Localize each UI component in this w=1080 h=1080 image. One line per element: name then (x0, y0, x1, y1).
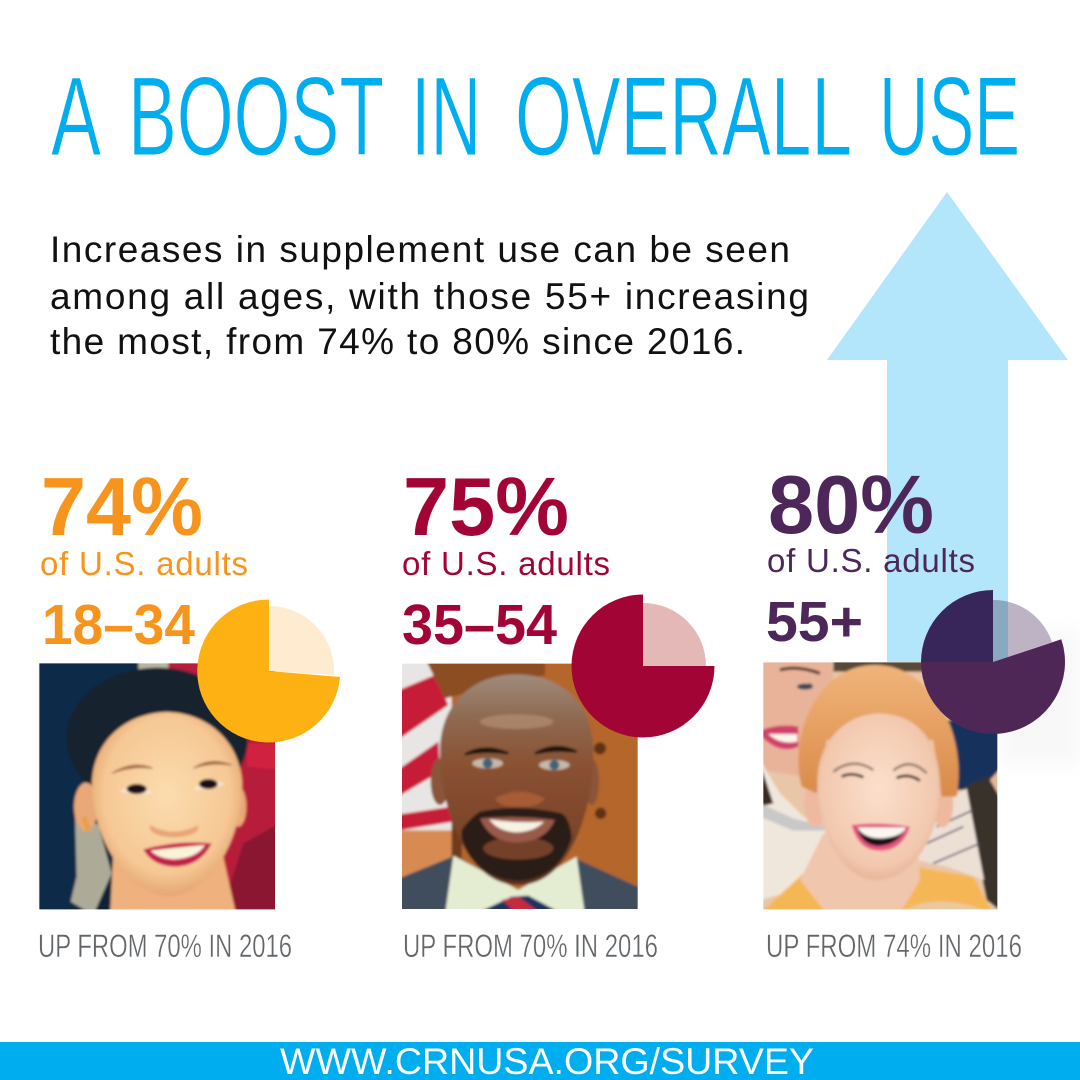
faint photo fade behind the third pie (1000, 630, 1080, 765)
photo: smiling man (395, 658, 645, 915)
pie chart: 74% (197, 599, 340, 742)
label: of U.S. adults: of U.S. adults (40, 545, 248, 582)
age group: 35–54 (402, 593, 557, 657)
age group: 55+ (766, 590, 863, 654)
title: BOOST (128, 54, 384, 179)
caption: UP FROM 70% IN 2016 (403, 928, 658, 964)
title: A (51, 54, 101, 179)
intro text: among all ages, with those 55+ increasing (50, 276, 809, 317)
panel: ages 18-34 (33, 460, 340, 964)
photo: laughing older woman (760, 657, 1003, 913)
footer bar (0, 1041, 1080, 1080)
intro text: Increases in supplement use can be seen (50, 229, 790, 270)
label: of U.S. adults: of U.S. adults (402, 545, 610, 582)
photo: young woman (33, 657, 280, 917)
panel: ages 55+ (760, 458, 1065, 964)
title (51, 54, 1020, 179)
panel: ages 35-54 (395, 460, 714, 964)
pie chart: 75% (572, 594, 714, 737)
arrow (827, 192, 1068, 662)
age group: 18–34 (42, 593, 195, 657)
stat: 80%: 80% (768, 458, 934, 551)
intro text (50, 229, 809, 362)
label: of U.S. adults: of U.S. adults (767, 542, 975, 579)
stat: 75%: 75% (403, 460, 569, 553)
title: OVERALL (515, 54, 852, 179)
intro text: the most, from 74% to 80% since 2016. (50, 321, 745, 362)
stat: 74%: 74% (41, 460, 203, 553)
title: IN (411, 54, 481, 179)
pie chart: 80% (921, 590, 1065, 734)
caption: UP FROM 70% IN 2016 (38, 928, 292, 964)
